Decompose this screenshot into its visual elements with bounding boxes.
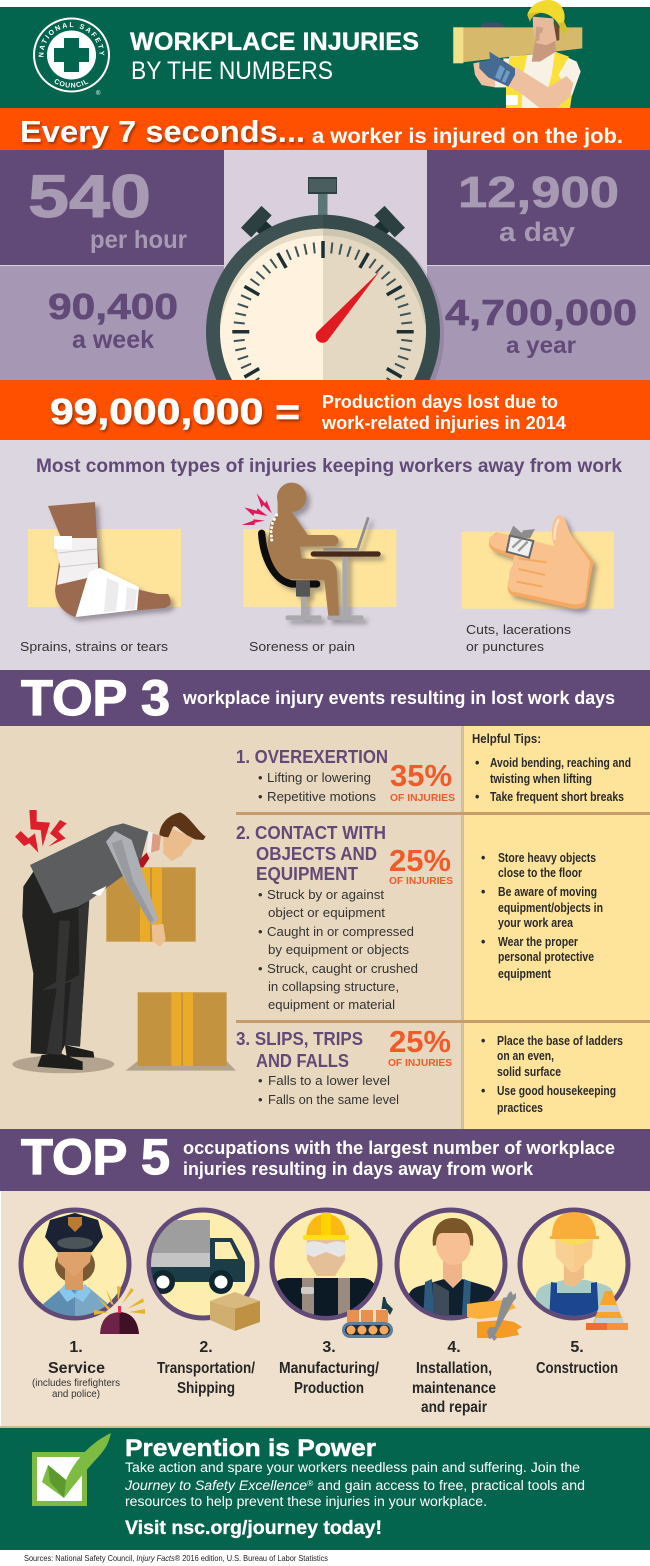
- title: [130, 28, 419, 85]
- label: cuts: or punctures: [466, 639, 545, 654]
- icon: construction worker carrying plank: [453, 0, 582, 108]
- body text: [124, 1460, 585, 1509]
- event 1 helpful tips: Take frequent short breaks: [490, 790, 624, 804]
- label: installation: and repair: [421, 1399, 487, 1416]
- panel: 4,700,000 a year: [427, 266, 650, 380]
- event 3: slips, trips and falls: Falls on the same level: [268, 1092, 399, 1107]
- occupation 4: installation: [397, 1210, 522, 1416]
- icon: stopwatch needle: [316, 272, 380, 343]
- event 2: contact with objects: OF INJURIES: [389, 875, 453, 887]
- panel: production days lost banner: Production days lost due to: [322, 392, 558, 412]
- event 1: overexertion: 1. OVEREXERTION: [236, 746, 388, 767]
- event 1: overexertion: Repetitive motions: [267, 789, 376, 804]
- label: manufacturing: Production: [294, 1380, 364, 1397]
- panel: 90,400 a week: [0, 266, 224, 380]
- event 3 helpful tips: on an even,: [497, 1049, 554, 1063]
- panel: top 3 header: TOP 3: [21, 670, 170, 726]
- icon: National Safety Council logo: [33, 18, 110, 97]
- panel: every 7 seconds banner: [0, 108, 650, 150]
- event 2 helpful tips: Be aware of moving: [498, 885, 597, 899]
- event 3: slips, trips and falls: OF INJURIES: [388, 1057, 452, 1069]
- event 1: overexertion: 35%: [390, 758, 452, 793]
- panel: 540 per hour: [0, 150, 224, 265]
- icon: National Safety Council logo: NATIONAL SAFETY: [38, 22, 104, 57]
- event 1: overexertion: •: [258, 770, 263, 785]
- event 3: slips, trips and falls: •: [258, 1092, 263, 1107]
- label: construction: [536, 1339, 618, 1377]
- event 2: contact with objects: Struck, caught or crushed: [267, 961, 418, 976]
- panel: top 5 occupations: [0, 1191, 650, 1563]
- event 2 helpful tips: your work area: [498, 916, 574, 930]
- title: WORKPLACE INJURIES: [130, 28, 419, 56]
- event 2: contact with objects: in collapsing structure,: [268, 979, 399, 994]
- label: manufacturing: 3.: [322, 1339, 336, 1356]
- event 2 helpful tips: •: [481, 935, 485, 949]
- body text: Journey to Safety Excellence: [124, 1478, 307, 1493]
- event 2 helpful tips: •: [481, 851, 485, 865]
- label: service: (includes firefighters: [32, 1377, 120, 1389]
- panel: top 3 injury events: [0, 726, 650, 1129]
- event 1 helpful tips: •: [475, 756, 479, 770]
- panel: 540 per hour: 540: [28, 163, 151, 230]
- panel: 90,400 a week: a week: [72, 326, 154, 354]
- icon: police officer: [21, 1210, 145, 1400]
- occupation 1: service: [21, 1210, 628, 1416]
- event 3 helpful tips: practices: [497, 1101, 543, 1115]
- panel: 540 per hour: per hour: [90, 226, 187, 254]
- panel: every 7 seconds banner: Every 7 seconds...: [20, 114, 305, 149]
- event 3: slips, trips and falls: 3. SLIPS, TRIPS: [236, 1028, 363, 1049]
- panel: 12,900 a day: a day: [499, 217, 575, 247]
- call to action: Visit nsc.org/journey today!: [125, 1518, 382, 1539]
- label: installation: Installation,: [416, 1360, 492, 1377]
- event 3 helpful tips: •: [481, 1084, 485, 1098]
- panel: 4,700,000 a year: 4,700,000: [445, 292, 637, 333]
- title: BY THE NUMBERS: [131, 57, 333, 85]
- event 2: contact with objects: 25%: [389, 843, 451, 878]
- event 2: contact with objects: Struck by or against: [267, 887, 384, 902]
- icon: service bell: [94, 1286, 145, 1334]
- body text: resources to help prevent these injuries in your workplace.: [125, 1494, 487, 1509]
- icon: stopwatch: [206, 177, 444, 380]
- event 1: overexertion: OF INJURIES: [390, 792, 455, 804]
- panel: production days lost banner: work-related injuries in 2014: [321, 413, 566, 433]
- body text: Take action and spare your workers needless pain and suffering. Join the: [125, 1460, 580, 1475]
- event 2 helpful tips: •: [481, 885, 485, 899]
- panel: 12,900 a day: 12,900: [458, 168, 619, 217]
- body text: ®: [307, 1479, 313, 1488]
- icon: cardboard box: [210, 1292, 260, 1331]
- event 2: contact with objects: •: [258, 924, 263, 939]
- panel: 12,900 a day: [427, 150, 650, 265]
- panel: production days lost banner: [0, 380, 650, 440]
- label: transportation: Shipping: [177, 1380, 235, 1397]
- event 2 helpful tips: equipment/objects in: [498, 901, 603, 915]
- event 2: contact with objects: equipment or material: [268, 997, 395, 1012]
- event 3: slips, trips and falls: [236, 1024, 452, 1107]
- panel: common injury types: [0, 440, 650, 670]
- event 2 helpful tips: personal protective: [498, 950, 594, 964]
- panel: production days lost banner: 99,000,000 =: [50, 391, 300, 432]
- panel: top 5 header: [0, 1129, 650, 1191]
- icon: factory worker: [270, 1210, 393, 1338]
- panel: top 5 header: occupations with the largest number of workplace: [183, 1138, 615, 1158]
- event 1: overexertion: [236, 746, 455, 804]
- event 1: overexertion: •: [258, 789, 263, 804]
- occupation 3: manufacturing: [270, 1210, 393, 1397]
- event 1 helpful tips: Helpful Tips:: [472, 732, 541, 746]
- event 2: contact with objects: 2. CONTACT WITH: [236, 822, 386, 843]
- label: installation: [412, 1339, 496, 1416]
- icon: bandaged ankle: [28, 502, 181, 617]
- panel: injury frequency stats: [0, 150, 650, 380]
- label: installation: 4.: [447, 1339, 461, 1356]
- label: service: Service: [48, 1360, 105, 1377]
- panel: top 5 header: TOP 5: [21, 1129, 170, 1185]
- label: service: and police): [52, 1388, 100, 1400]
- label: sprains: Sprains, strains or tears: [20, 639, 169, 654]
- label: soreness: Soreness or pain: [249, 639, 355, 654]
- label: manufacturing: [279, 1339, 379, 1397]
- panel: every 7 seconds banner: a worker is injured on the job.: [312, 125, 623, 148]
- occupation 5: construction: [520, 1210, 628, 1377]
- event 3 helpful tips: Use good housekeeping: [497, 1084, 616, 1098]
- icon: National Safety Council logo: ®: [96, 90, 101, 97]
- event 2 helpful tips: [481, 851, 603, 981]
- body text: and gain access to free, practical tools and: [313, 1478, 585, 1493]
- panel: 90,400 a week: 90,400: [48, 286, 178, 327]
- event 2: contact with objects: Caught in or compressed: [267, 924, 414, 939]
- icon: conveyor belt: [342, 1297, 393, 1338]
- event 1: overexertion: Lifting or lowering: [267, 770, 371, 785]
- sources: Sources: National Safety Council, Injury Facts® 2016 edition, U.S. Bureau of Labor Statistics: [24, 1553, 328, 1563]
- label: construction: 5.: [570, 1339, 584, 1356]
- event 3 helpful tips: •: [481, 1034, 485, 1048]
- event 2: contact with objects: •: [258, 961, 263, 976]
- event 3: slips, trips and falls: AND FALLS: [256, 1050, 349, 1071]
- event 2: contact with objects: [236, 822, 453, 1012]
- event 2: contact with objects: EQUIPMENT: [256, 863, 359, 884]
- icon: bandaged hand: [462, 515, 614, 609]
- event 2: contact with objects: object or equipment: [268, 905, 385, 920]
- event 2: contact with objects: by equipment or objects: [268, 942, 410, 957]
- label: transportation: Transportation/: [157, 1360, 255, 1377]
- label: transportation: 2.: [199, 1339, 213, 1356]
- event 2 helpful tips: Wear the proper: [498, 935, 578, 949]
- event 2 helpful tips: equipment: [498, 967, 552, 981]
- event 1 helpful tips: •: [475, 790, 479, 804]
- event 1 helpful tips: twisting when lifting: [490, 772, 592, 786]
- event 1 helpful tips: [472, 732, 631, 804]
- icon: seated worker with back pain: [242, 483, 396, 620]
- event 3 helpful tips: Place the base of ladders: [497, 1034, 623, 1048]
- icon: traffic cone: [586, 1291, 628, 1330]
- event 2: contact with objects: •: [258, 887, 263, 902]
- icon: construction worker: [520, 1210, 628, 1330]
- panel: top 5 header: injuries resulting in days away from work: [183, 1159, 534, 1179]
- icon: gloves and wrench: [467, 1291, 522, 1341]
- heading: most common injuries: Most common types of injuries keeping workers away from work: [36, 456, 622, 477]
- event 3: slips, trips and falls: •: [258, 1073, 263, 1088]
- illustration: man with back pain lifting box: [12, 810, 236, 1073]
- event 2 helpful tips: close to the floor: [498, 866, 582, 880]
- label: installation: maintenance: [412, 1380, 496, 1397]
- label: cuts: [466, 622, 572, 654]
- label: service: 1.: [69, 1339, 83, 1356]
- label: cuts: Cuts, lacerations: [466, 622, 572, 637]
- event 3 helpful tips: solid surface: [497, 1065, 561, 1079]
- icon: repair technician: [397, 1210, 522, 1341]
- icon: pain bolts: [15, 810, 67, 853]
- heading: prevention is power: Prevention is Power: [125, 1435, 376, 1462]
- icon: green check box: [32, 1433, 111, 1506]
- panel: prevention is power: [0, 1426, 650, 1550]
- label: service: [32, 1339, 120, 1400]
- panel: 4,700,000 a year: a year: [506, 332, 576, 358]
- panel: top 3 header: [0, 670, 650, 726]
- icon: delivery truck: [140, 1210, 260, 1331]
- panel: top 3 header: workplace injury events resulting in lost work days: [182, 688, 615, 708]
- label: transportation: [157, 1339, 255, 1397]
- event 2 helpful tips: Store heavy objects: [498, 851, 596, 865]
- event 2: contact with objects: OBJECTS AND: [256, 843, 377, 864]
- event 3: slips, trips and falls: 25%: [389, 1024, 451, 1059]
- occupation 2: transportation: [140, 1210, 260, 1397]
- icon: National Safety Council logo: COUNCIL: [54, 79, 88, 88]
- event 3: slips, trips and falls: Falls to a lower level: [268, 1073, 390, 1088]
- event 3 helpful tips: [481, 1034, 623, 1115]
- panel: header: [0, 0, 650, 108]
- label: construction: Construction: [536, 1360, 618, 1377]
- label: manufacturing: Manufacturing/: [279, 1360, 379, 1377]
